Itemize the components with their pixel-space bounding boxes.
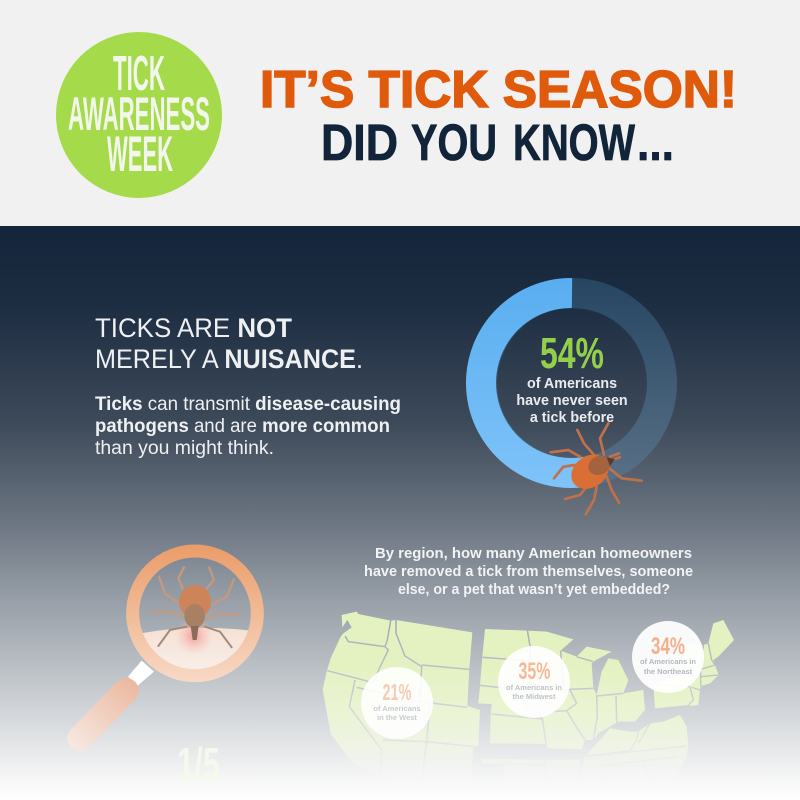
header band [0, 0, 800, 226]
body text: Ticks can transmit disease-causing [95, 394, 401, 415]
stat: one in five: 1/5 [177, 738, 220, 790]
magnifier ring [133, 551, 257, 676]
question text: By region, how many American homeowners [375, 546, 692, 562]
badge: tick awareness week: WEEK [107, 126, 173, 182]
dark gradient panel [0, 226, 800, 800]
icon: tick on donut [551, 423, 642, 514]
donut chart: 54 percent [481, 293, 662, 473]
badge: tick awareness week [56, 32, 222, 198]
magnifier handle [80, 691, 126, 738]
skin under lens [142, 622, 248, 670]
map: South region [482, 715, 688, 793]
heading: not merely a nuisance: TICKS ARE NOT [95, 313, 292, 343]
subtitle: ... [637, 114, 674, 171]
callout: Midwest: the Midwest [513, 692, 556, 701]
callout: Northeast [632, 621, 704, 693]
callout: Northeast: of Americans in [640, 657, 696, 666]
heading: not merely a nuisance [95, 313, 363, 374]
callout: Midwest: 35% [518, 658, 550, 685]
callout: Northeast: 34% [651, 633, 685, 660]
subtitle: DID [321, 114, 398, 171]
callout: West: 21% [382, 679, 412, 705]
tick in lens [152, 567, 239, 647]
callout: Midwest [498, 646, 570, 718]
map of the United States [323, 612, 734, 793]
subtitle [321, 114, 674, 171]
map: Northeast region [653, 620, 734, 708]
stat: 54 percent of Americans: have never seen [516, 393, 628, 409]
stat: 54 percent of Americans [516, 329, 628, 426]
callout: Northeast: the Northeast [644, 667, 693, 676]
stat: 54 percent of Americans: a tick before [530, 410, 614, 426]
heading: not merely a nuisance: MERELY A NUISANCE. [95, 344, 363, 374]
map: Midwest region [478, 629, 645, 749]
icon: magnifying glass with tick [80, 551, 257, 738]
body text: pathogens and are more common [95, 416, 390, 437]
question text: else, or a pet that wasn’t yet embedded? [398, 582, 670, 598]
badge: tick awareness week: TICK [113, 47, 165, 101]
stat: 54 percent of Americans: of Americans [527, 376, 617, 392]
subtitle: KNOW [513, 114, 636, 171]
callout: Midwest: of Americans in [506, 683, 562, 692]
callout: West [361, 667, 433, 739]
subtitle: YOU [411, 114, 497, 171]
badge: tick awareness week: AWARENESS [68, 87, 210, 140]
question text [364, 546, 693, 598]
stat: 54 percent of Americans: 54% [540, 329, 604, 378]
magnifier connector [128, 661, 154, 686]
callout: West: in the West [377, 713, 417, 722]
body text: than you might think. [95, 438, 274, 459]
question text: have removed a tick from themselves, someone [364, 564, 693, 580]
map: West region [323, 612, 480, 793]
body text [95, 394, 401, 459]
title: IT’S TICK SEASON! [260, 61, 737, 119]
callout: West: of Americans [373, 704, 421, 713]
